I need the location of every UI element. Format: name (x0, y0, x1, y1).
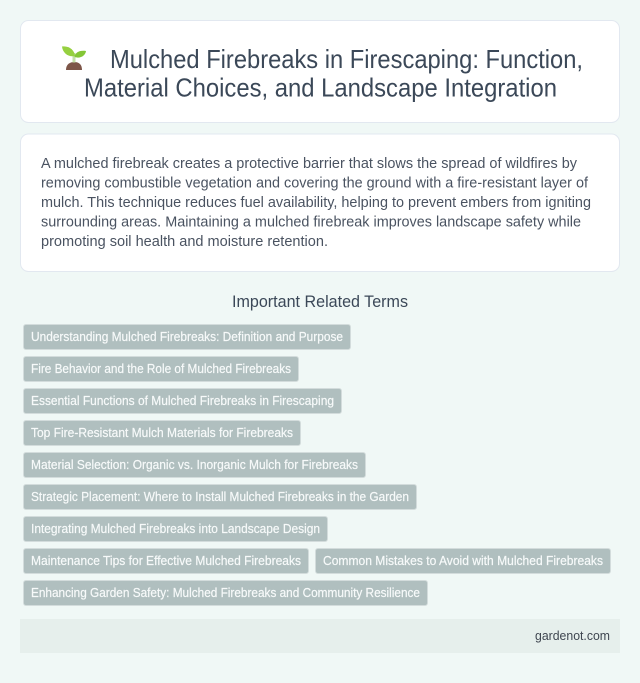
tag 2: Fire Behavior and the Role of Mulched Firebreaks (31, 361, 291, 376)
description text: mulch. This technique reduces fuel availability, helping to prevent embers from igniting (41, 194, 591, 211)
title: Mulched Firebreaks in Firescaping: Function, (110, 44, 583, 74)
title (84, 44, 583, 102)
description text: removing combustible vegetation and covering the ground with a fire-resistant layer of (41, 175, 589, 192)
tag 7 (24, 516, 328, 542)
tag 9: Common Mistakes to Avoid with Mulched Firebreaks (323, 553, 603, 568)
tag list (24, 324, 610, 606)
tag 10 (24, 580, 428, 606)
tag 5: Material Selection: Organic vs. Inorganic Mulch for Firebreaks (31, 457, 358, 472)
tag 3: Essential Functions of Mulched Firebreaks in Firescaping (31, 393, 334, 408)
title: Material Choices, and Landscape Integration (84, 72, 557, 102)
description text (41, 155, 591, 250)
description text: A mulched firebreak creates a protective barrier that slows the spread of wildfires by (41, 155, 577, 172)
tag 8 (24, 548, 308, 574)
description text: promoting soil health and moisture retention. (41, 233, 328, 250)
description text: surrounding areas. Maintaining a mulched firebreak improves landscape safety while (41, 214, 581, 230)
tag 1: Understanding Mulched Firebreaks: Definition and Purpose (31, 329, 343, 344)
tag 4: Top Fire-Resistant Mulch Materials for Firebreaks (31, 425, 293, 440)
panel: description (20, 134, 620, 272)
tag 10: Enhancing Garden Safety: Mulched Firebreaks and Community Resilience (31, 585, 420, 600)
tag 4 (24, 420, 300, 446)
tag 1 (24, 324, 350, 350)
heading: related terms: Important Related Terms (232, 293, 408, 311)
footer source: gardenot.com (535, 628, 610, 643)
tag 9 (316, 548, 610, 574)
tag 7: Integrating Mulched Firebreaks into Landscape Design (31, 521, 320, 536)
tag 3 (24, 388, 342, 414)
tag 5 (24, 452, 366, 478)
tag 2 (24, 356, 298, 382)
tag 6: Strategic Placement: Where to Install Mulched Firebreaks in the Garden (31, 489, 409, 504)
tag 8: Maintenance Tips for Effective Mulched Firebreaks (31, 553, 301, 568)
panel: title card (20, 20, 620, 122)
tag 6 (24, 484, 416, 510)
footer (20, 619, 620, 653)
icon: sprout (62, 46, 86, 70)
